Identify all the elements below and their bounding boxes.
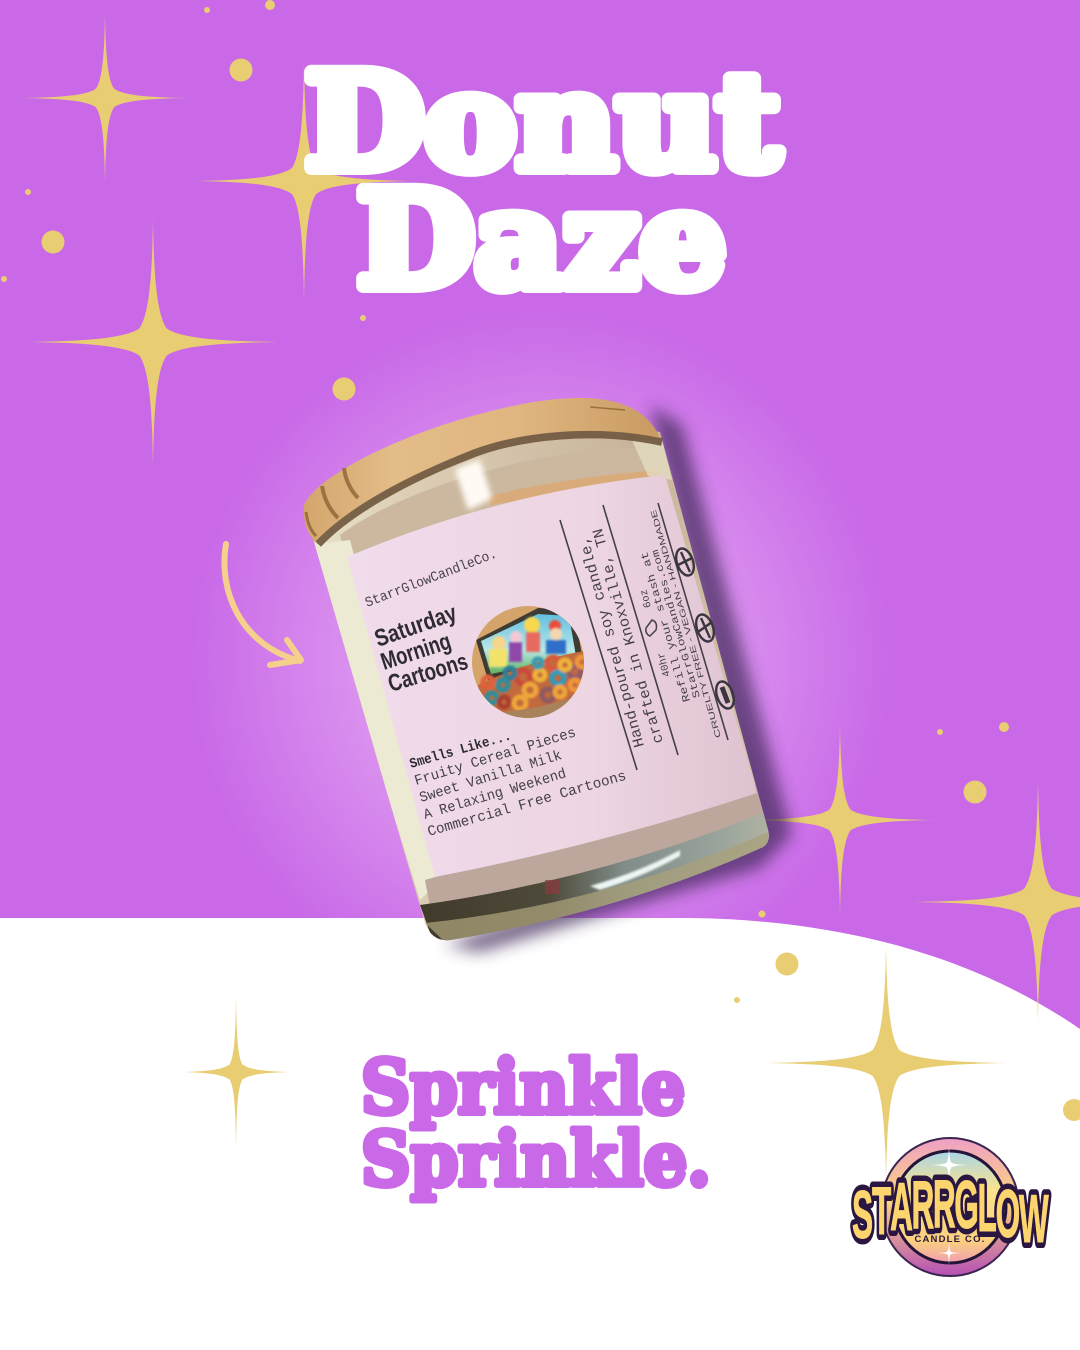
logo: Starrglow Candle Co.: [852, 1138, 1049, 1276]
scent illustration: cartoons and cereal: [472, 606, 584, 718]
side text and dividers: 6oz: [638, 588, 655, 609]
title: Donut Daze: [305, 45, 780, 318]
tagline: Sprinkle Sprinkle.: Sprinkle: [361, 1045, 685, 1131]
side text and dividers: crafted in Knoxville, TN: [590, 526, 668, 745]
logo sparkle top: [927, 1143, 971, 1187]
wooden lid: [304, 398, 660, 542]
candle jar: [304, 398, 792, 960]
side text and dividers: CRUELTY FREE - VEGAN - HANDMADE: [649, 509, 723, 739]
icon: heart: [646, 620, 656, 636]
scent name on label: [371, 599, 471, 698]
side text and dividers: 40hr: [656, 651, 674, 678]
side text and dividers: [560, 503, 728, 770]
side text and dividers: Hand-poured soy candle,: [576, 534, 649, 749]
label: [347, 475, 757, 877]
scent notes: Sweet Vanilla Milk: [418, 748, 564, 807]
white wave panel: [0, 918, 1080, 1350]
side text and dividers: Refill your stash at: [639, 550, 694, 703]
scent notes: A Relaxing Weekend: [422, 766, 568, 824]
side text and dividers: StarrGlowCandles.com: [650, 548, 704, 699]
scent name on label: Morning: [378, 628, 454, 676]
logo sparkle bottom: [935, 1239, 963, 1267]
tagline: Sprinkle Sprinkle.: Sprinkle.: [361, 1117, 711, 1203]
icons: cruelty free badges: [673, 546, 737, 711]
scent notes: Smells Like...: [408, 728, 513, 773]
logo subtitle: CANDLE CO.: [914, 1234, 986, 1245]
glass body: [312, 426, 769, 940]
tagline: Sprinkle Sprinkle.: [361, 1045, 711, 1203]
arrow pointing to candle: [224, 544, 301, 665]
brand name on label: StarrGlowCandleCo.: [363, 547, 499, 612]
logo inner disc: [894, 1151, 1006, 1263]
title: Donut Daze: Donut: [305, 45, 780, 200]
lid grain: [306, 407, 625, 536]
title: Donut Daze: Daze: [357, 163, 726, 318]
scent notes: Commercial Free Cartoons: [426, 769, 628, 841]
jar shadow: [445, 405, 792, 952]
logo wordmark fill: STARRGLOW: [852, 1167, 1049, 1257]
scent name on label: Cartoons: [385, 648, 471, 698]
background glow: [150, 280, 930, 1020]
lid shadow line: [318, 434, 662, 544]
logo wordmark outline: STARRGLOW: [852, 1167, 1049, 1257]
wax, highlight and base glass: [310, 440, 790, 960]
scent notes: [408, 725, 628, 841]
logo badge: [881, 1138, 1019, 1276]
scent name on label: Saturday: [371, 599, 461, 653]
scent notes: Fruity Cereal Pieces: [413, 725, 578, 790]
